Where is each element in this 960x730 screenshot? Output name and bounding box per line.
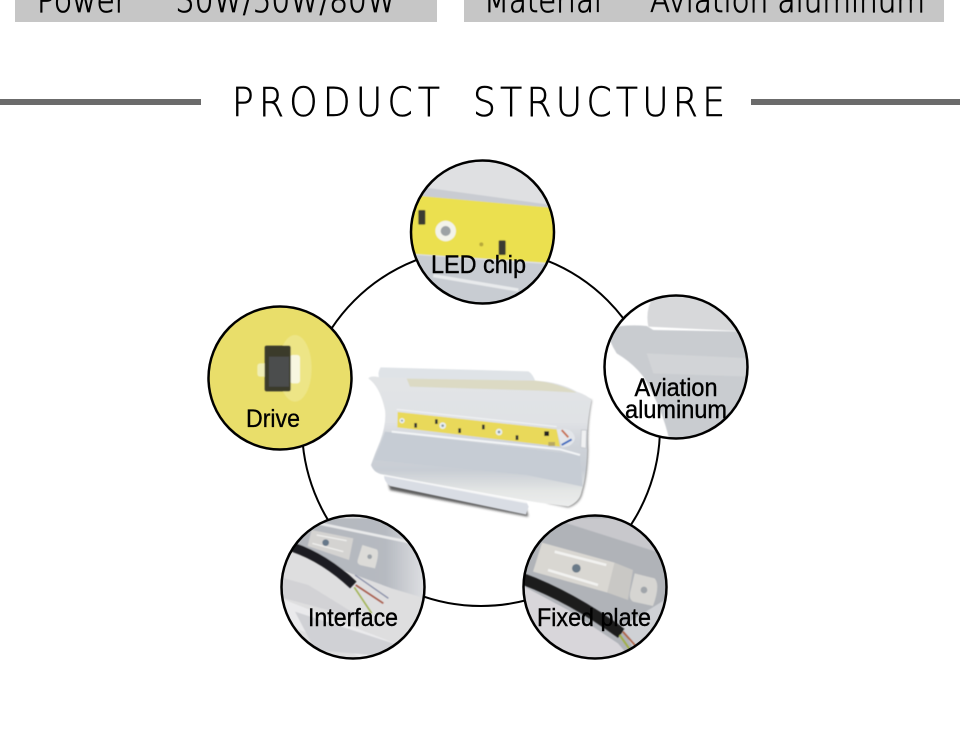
detail circle: Interface: Interface	[308, 604, 398, 632]
spec row: power	[15, 0, 437, 22]
detail circle: Aviation aluminum	[603, 294, 750, 443]
detail circle: LED chip: LED chip	[431, 251, 526, 279]
section heading with rules	[0, 79, 960, 125]
detail circle: Fixed plate	[521, 514, 668, 667]
detail circle: Drive: Drive	[246, 405, 300, 433]
detail circle: LED chip	[408, 159, 558, 312]
spec row: material	[464, 0, 944, 22]
detail circle: Aviation aluminum: Aviation	[634, 374, 718, 402]
back flange	[378, 367, 536, 383]
yellow circuit board	[397, 412, 560, 447]
reflector body	[368, 377, 592, 507]
lower reflector shaded panel	[374, 432, 583, 487]
detail circle: Drive	[207, 305, 353, 451]
connecting ring	[302, 248, 660, 606]
central product: LED lamp	[368, 367, 592, 517]
detail circle: Interface	[278, 514, 426, 663]
bottom flange	[384, 475, 529, 515]
highlights	[392, 432, 580, 455]
terminal and wires	[557, 429, 575, 447]
section heading with rules: STRUCTURE	[473, 79, 725, 125]
section heading with rules: PRODUCT	[232, 79, 440, 125]
detail circle: Aviation aluminum: aluminum	[625, 396, 727, 424]
detail circle: Fixed plate: Fixed plate	[537, 604, 651, 632]
